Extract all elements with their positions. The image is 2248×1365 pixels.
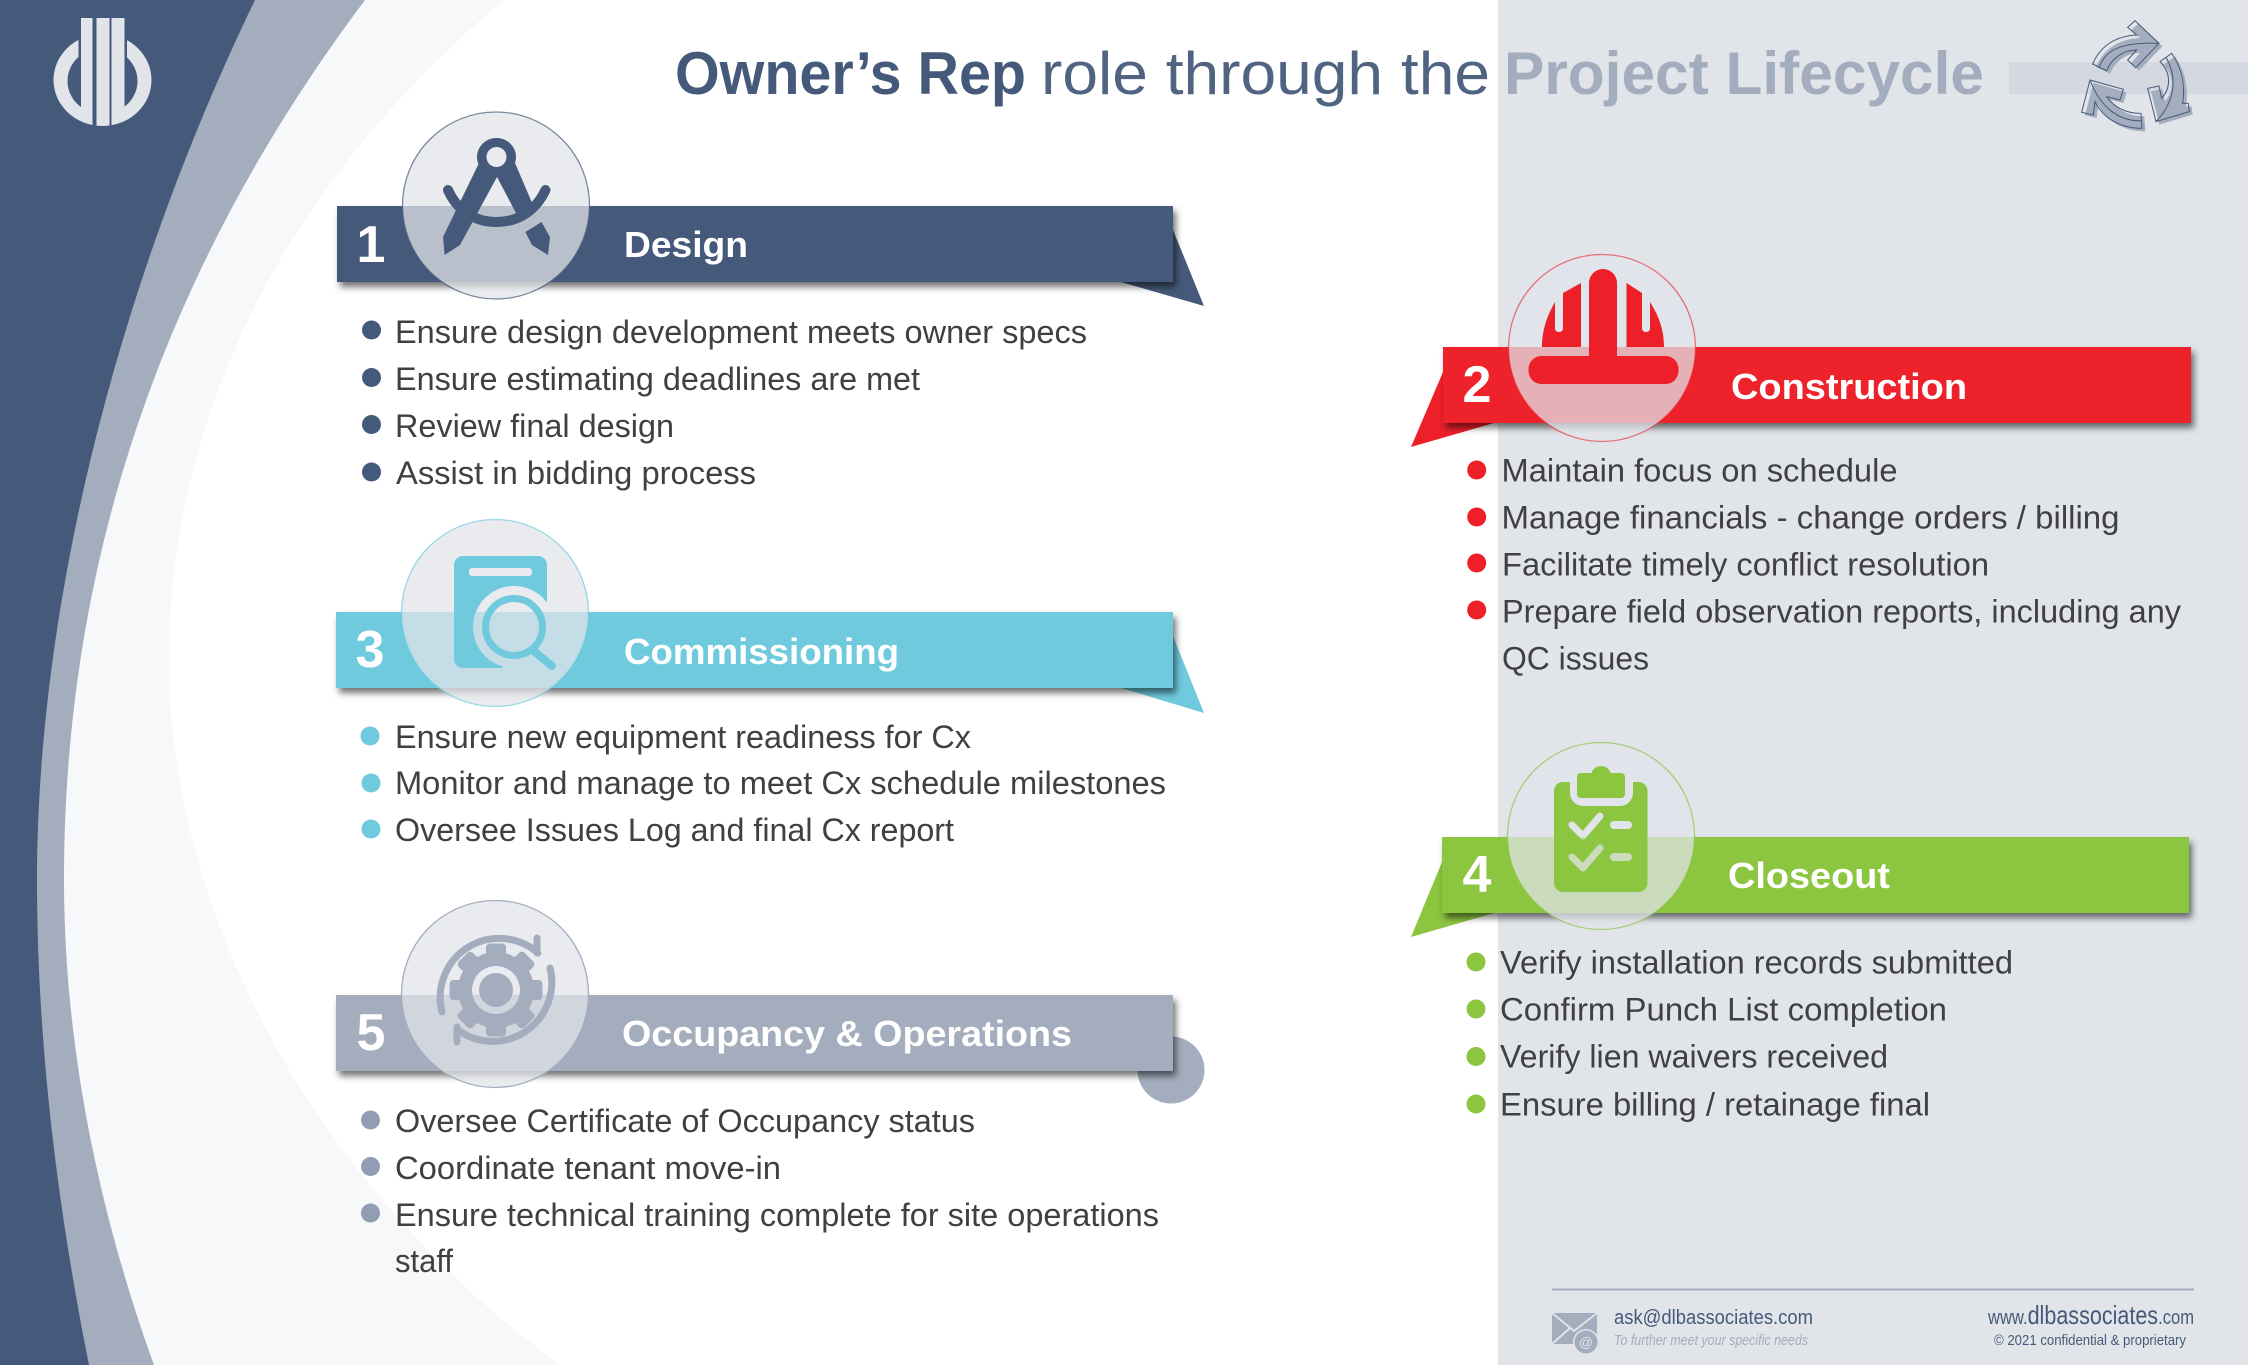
bullet list: closeout: Ensure billing / retainage final — [1500, 1086, 1930, 1122]
panel: 3 Commissioning — [336, 520, 1204, 848]
bullet list: construction — [1467, 452, 2181, 676]
step number 1: 1 — [357, 216, 385, 274]
ribbon: design — [337, 206, 1204, 306]
panel: 2 Construction — [1411, 254, 2191, 676]
icon circle: closeout — [1508, 742, 1694, 930]
title — [675, 40, 1984, 107]
ribbon: occupancy and operations — [336, 995, 1204, 1104]
bullet list: construction: Maintain focus on schedule — [1502, 452, 1898, 488]
panel: 4 Closeout — [1411, 742, 2189, 1122]
heading: design: Design — [624, 224, 748, 265]
title accent band — [2009, 62, 2248, 94]
background: dark navy curve — [0, 0, 255, 1365]
icon circle: commissioning — [402, 520, 588, 706]
background: medium blue-grey curve — [0, 0, 365, 1365]
step number 5: 5 — [357, 1004, 385, 1062]
icon: envelope with at sign: @ — [1579, 1334, 1593, 1350]
bullet list: occupancy and operations: Coordinate tenant move-in — [395, 1150, 781, 1186]
bullet list: design: Ensure estimating deadlines are met — [395, 361, 920, 397]
panel: 5 Occupancy and Operations — [336, 900, 1204, 1279]
title: role through the — [1041, 40, 1490, 107]
copyright: © 2021 confidential & proprietary — [1994, 1332, 2186, 1349]
bullet list: closeout: Verify installation records submitted — [1500, 944, 2013, 980]
heading: occupancy and operations: Occupancy & Operations — [622, 1013, 1072, 1054]
bullet list: closeout: Verify lien waivers received — [1500, 1038, 1888, 1074]
heading: commissioning: Commissioning — [624, 631, 899, 672]
bullet list: design: Review final design — [395, 408, 674, 444]
bullet list: closeout: Confirm Punch List completion — [1500, 992, 1947, 1028]
bullet list: commissioning: Monitor and manage to meet Cx schedule milestones — [395, 765, 1166, 801]
bullet list: occupancy and operations — [361, 1103, 1159, 1279]
bullet list: design: Ensure design development meets owner specs — [395, 314, 1087, 350]
heading: construction: Construction — [1731, 366, 1967, 407]
bullet list: commissioning: Oversee Issues Log and final Cx report — [395, 812, 954, 848]
icon circle: design — [402, 112, 590, 299]
icon: document and magnifier — [454, 556, 556, 670]
bullet list: closeout — [1466, 944, 2013, 1122]
icon: drafting compass — [443, 138, 550, 255]
contact email: ask@dlbassociates.com — [1614, 1307, 1813, 1329]
icon: hard hat — [1528, 269, 1678, 384]
bullet list: construction: Manage financials - change orders / billing — [1502, 500, 2120, 536]
bullet list: construction: Facilitate timely conflict resolution — [1502, 546, 1989, 582]
title: Owner’s Rep — [675, 40, 1026, 107]
bullet list: design: Assist in bidding process — [396, 455, 756, 491]
background: right grey panel — [1498, 0, 2248, 1365]
tagline: To further meet your specific needs — [1614, 1332, 1808, 1349]
icon: gear with cycle arrows — [440, 938, 552, 1042]
icon: envelope with at sign — [1552, 1313, 1599, 1355]
bullet list: occupancy and operations: Oversee Certificate of Occupancy status — [395, 1103, 975, 1139]
step number 4: 4 — [1463, 846, 1492, 904]
logo: dlb mark — [54, 18, 152, 127]
bullet list: occupancy and operations: Ensure technical training complete for site operations — [395, 1197, 1159, 1233]
icon: lifecycle recycling arrows — [2082, 21, 2193, 131]
panel: 1 Design — [337, 112, 1204, 491]
icon circle: construction — [1508, 254, 1696, 442]
icon circle: occupancy and operations — [402, 900, 588, 1088]
heading: closeout: Closeout — [1728, 855, 1890, 896]
bullet list: construction: QC issues — [1502, 640, 1649, 676]
bullet list: commissioning — [360, 719, 1166, 848]
icon: clipboard checklist — [1554, 766, 1648, 892]
bullet list: occupancy and operations: staff — [395, 1243, 453, 1279]
footer — [1552, 1288, 2194, 1355]
bullet list: construction: Prepare field observation reports, including any — [1502, 594, 2181, 630]
ribbon: construction — [1411, 347, 2191, 447]
bullet list: design — [362, 314, 1087, 491]
title: Project Lifecycle — [1504, 40, 1984, 107]
bullet list: commissioning: Ensure new equipment readiness for Cx — [395, 719, 971, 755]
background: pale outer curve — [0, 0, 560, 1365]
step number 3: 3 — [356, 621, 384, 679]
ribbon: commissioning — [336, 612, 1204, 713]
website: www.dlbassociates.com — [1987, 1300, 2194, 1330]
step number 2: 2 — [1463, 356, 1491, 414]
ribbon: closeout — [1411, 837, 2189, 937]
